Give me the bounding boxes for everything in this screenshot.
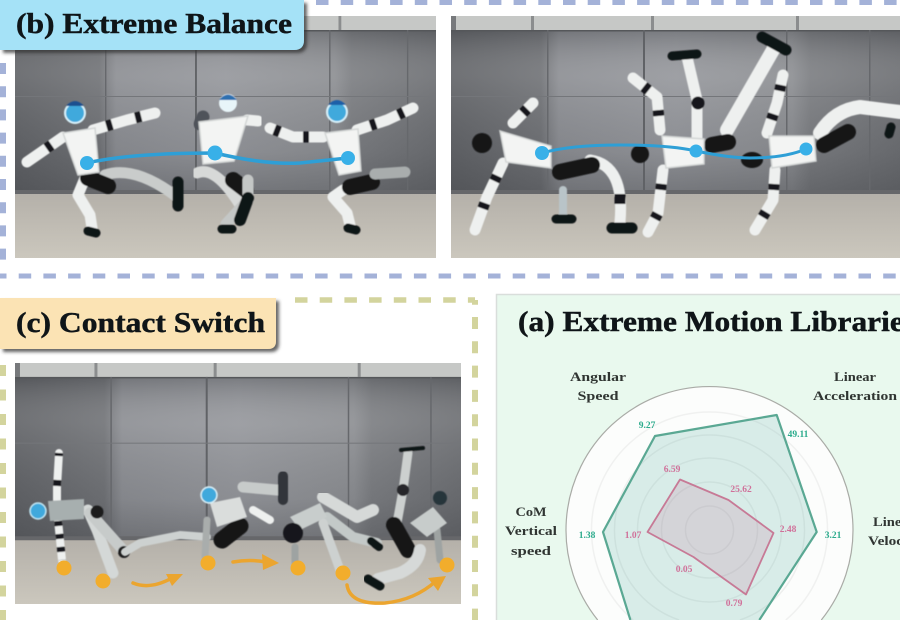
dashed border: olive bbox=[3, 300, 475, 620]
robot: bent pose bbox=[472, 103, 632, 230]
axis labels: CoM bbox=[516, 504, 546, 519]
robot: contact pose two bbox=[125, 476, 283, 557]
robot: contact pose three bbox=[283, 497, 379, 570]
inner series values bbox=[625, 465, 797, 609]
outer series values: 1.38 bbox=[579, 531, 596, 541]
outer series values bbox=[579, 421, 842, 541]
centre of mass trajectory bbox=[80, 146, 355, 170]
contact points bbox=[56, 556, 454, 588]
axis labels: Acceleration bbox=[813, 388, 898, 403]
heading: contact switch bbox=[0, 298, 276, 349]
axis labels bbox=[505, 369, 900, 558]
radar grid bbox=[566, 387, 853, 620]
inner series values: 25.62 bbox=[730, 485, 752, 495]
heading: extreme motion libraries: (a) Extreme Motion Libraries bbox=[518, 307, 900, 338]
outer series values: 9.27 bbox=[639, 421, 656, 431]
axis labels: Vertical bbox=[505, 523, 557, 538]
robot: balance pose three bbox=[270, 100, 413, 230]
panel: extreme motion libraries bbox=[496, 294, 900, 620]
robot: handstand pose bbox=[631, 37, 786, 232]
centre of mass trajectory bbox=[535, 142, 812, 160]
inner series values: 0.05 bbox=[676, 565, 693, 575]
arrow: third contact switch bbox=[347, 576, 446, 603]
series: motion library outer polygon bbox=[603, 415, 817, 620]
inner series values: 2.48 bbox=[780, 525, 797, 535]
photo: contact sequence bbox=[15, 363, 461, 604]
outer series values: 3.21 bbox=[825, 531, 842, 541]
axis labels: Linear bbox=[834, 369, 876, 384]
axis labels: Speed bbox=[578, 388, 619, 403]
robot: contact pose four bbox=[368, 448, 447, 586]
radar chart bbox=[505, 369, 900, 620]
robot: balance pose one bbox=[27, 101, 178, 233]
dashed border: blue bbox=[0, 2, 900, 276]
axis labels: Angular bbox=[570, 369, 626, 384]
robot: contact pose one bbox=[30, 453, 130, 573]
inner series values: 6.59 bbox=[664, 465, 681, 475]
panel: contact switch bbox=[0, 298, 475, 620]
robot: balance pose two bbox=[197, 94, 258, 229]
inner series values: 1.07 bbox=[625, 531, 642, 541]
arrow: second contact switch bbox=[233, 554, 279, 570]
robot: flip pose bbox=[741, 75, 900, 230]
heading: extreme balance bbox=[0, 0, 304, 50]
heading: extreme balance: (b) Extreme Balance bbox=[16, 9, 292, 40]
arrow: first contact switch bbox=[133, 574, 183, 586]
heading: contact switch: (c) Contact Switch bbox=[16, 308, 265, 339]
photo: balance sequence one bbox=[15, 16, 436, 258]
series: baseline inner polygon bbox=[648, 480, 774, 594]
axis labels: speed bbox=[511, 543, 552, 558]
photo: balance sequence two bbox=[451, 16, 900, 258]
panel: extreme balance bbox=[0, 0, 900, 276]
outer series values: 49.11 bbox=[788, 430, 809, 440]
inner series values: 0.79 bbox=[726, 599, 743, 609]
